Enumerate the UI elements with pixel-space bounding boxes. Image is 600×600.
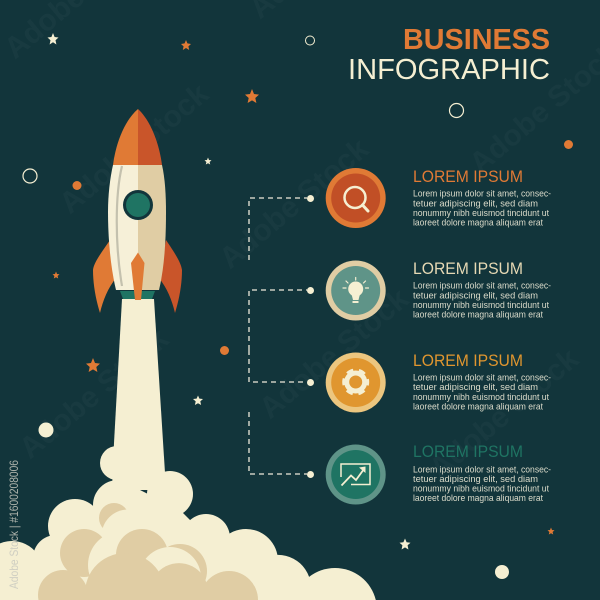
heading 3: LOREM IPSUM: [413, 351, 523, 370]
icon: magnifier badge: [326, 168, 386, 228]
porthole window: [123, 190, 153, 220]
body text 1: Lorem ipsum dolor sit amet, consec-: [413, 188, 551, 200]
connector lines: [249, 195, 314, 478]
body text 4: laoreet dolore magna aliquam erat: [413, 493, 543, 504]
heading 4: LOREM IPSUM: [413, 442, 523, 461]
watermark: Adobe Stock: [423, 342, 585, 485]
body text 3: tetuer adipiscing elit, sed diam: [413, 382, 538, 393]
body text 1: laoreet dolore magna aliquam erat: [413, 218, 543, 228]
left fin: [93, 240, 116, 313]
body text 1: nonummy nibh euismod tincidunt ut: [413, 208, 549, 219]
body text 1: [413, 188, 551, 228]
title: BUSINESS: [403, 24, 550, 56]
heading 2: LOREM IPSUM: [413, 259, 523, 278]
body text 2: Lorem ipsum dolor sit amet, consec-: [413, 280, 551, 292]
body text 3: laoreet dolore magna aliquam erat: [413, 402, 543, 412]
right fin: [159, 240, 182, 313]
centre fin: [131, 252, 144, 300]
title: INFOGRAPHIC: [348, 54, 550, 86]
exhaust flame: [112, 299, 165, 490]
body text 2: tetuer adipiscing elit, sed diam: [413, 290, 538, 302]
body text 2: [413, 280, 551, 320]
icon: gear badge: [326, 352, 386, 412]
smoke cloud: [0, 446, 376, 600]
icon: light bulb badge: [326, 260, 386, 320]
watermark: Adobe Stock: [13, 322, 175, 465]
heading 1: LOREM IPSUM: [413, 167, 523, 186]
item 4: growth: [326, 442, 551, 504]
item 1: search: [326, 167, 551, 228]
body text 4: tetuer adipiscing elit, sed diam: [413, 474, 538, 485]
body text 3: Lorem ipsum dolor sit amet, consec-: [413, 372, 551, 384]
item 2: idea: [326, 259, 551, 320]
body text 4: Lorem ipsum dolor sit amet, consec-: [413, 464, 551, 476]
body text 4: nonummy nibh euismod tincidunt ut: [413, 484, 549, 494]
watermark: Adobe Stock: [213, 132, 375, 275]
body text 2: nonummy nibh euismod tincidunt ut: [413, 300, 549, 311]
body text 3: nonummy nibh euismod tincidunt ut: [413, 392, 549, 403]
rocket: [93, 109, 182, 313]
item 3: settings: [326, 351, 551, 412]
icon: growth chart badge: [326, 444, 386, 504]
title: [348, 24, 550, 86]
decorative stars: [48, 33, 554, 550]
body text 2: laoreet dolore magna aliquam erat: [413, 310, 543, 320]
nozzle: [120, 291, 155, 299]
rocket body: [108, 165, 166, 290]
body text 3: [413, 372, 551, 412]
watermark: Adobe Stock: [253, 282, 415, 425]
watermark: Adobe Stock: [53, 77, 215, 220]
body text 1: tetuer adipiscing elit, sed diam: [413, 198, 538, 210]
body text 4: [413, 464, 551, 504]
nose cone: [113, 109, 162, 165]
stock id text: Adobe Stock | #1600208006: [7, 460, 21, 589]
